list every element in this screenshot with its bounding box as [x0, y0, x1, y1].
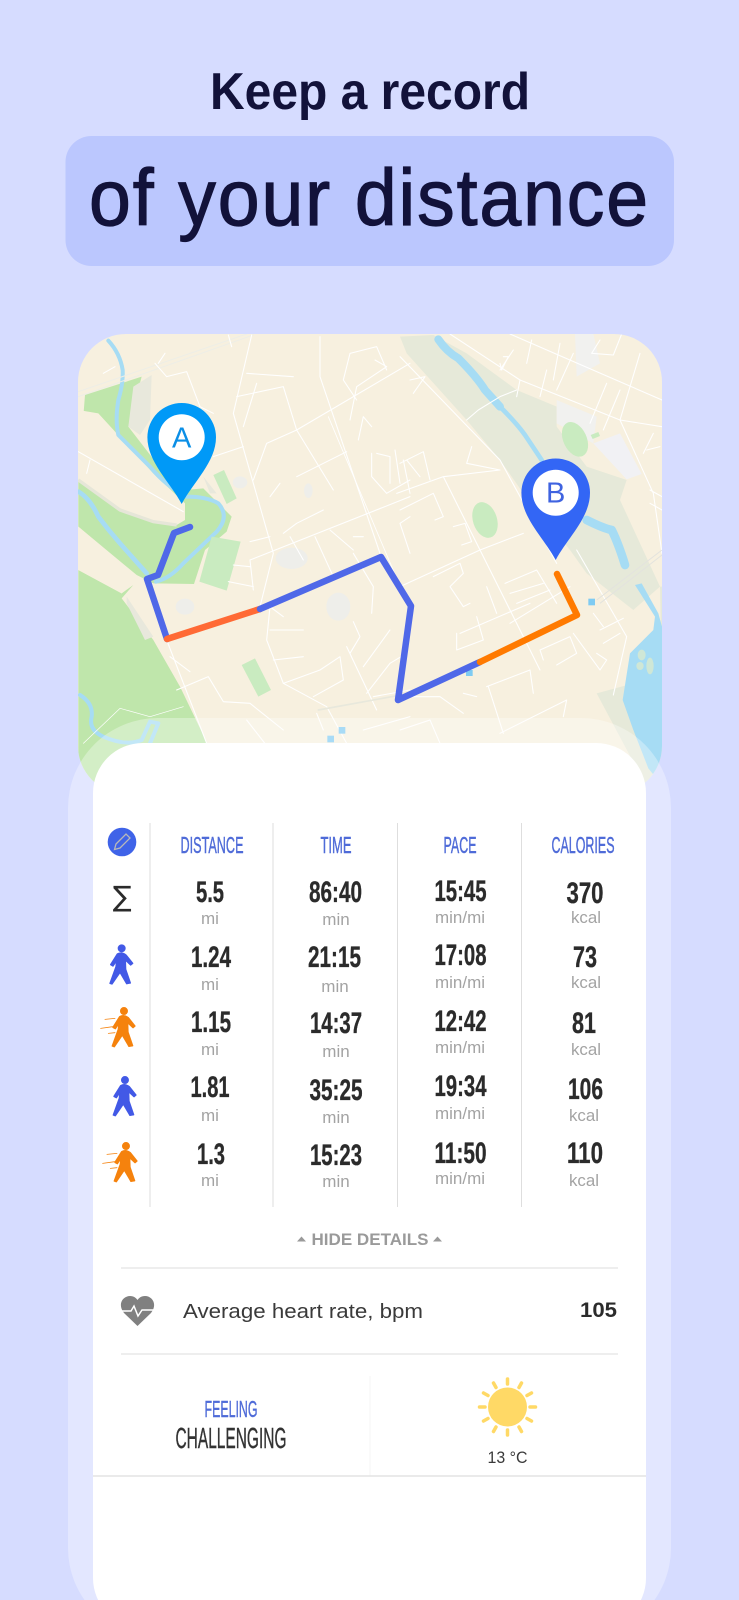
column: distance: mi: [201, 1106, 219, 1125]
column: pace: 11:50: [434, 1137, 486, 1170]
column: time: min: [322, 1172, 350, 1191]
hide details toggle: HIDE DETAILS: [312, 1230, 428, 1249]
pin B: B: [546, 478, 565, 510]
column: calories: kcal: [571, 908, 601, 927]
column: pace: min/mi: [435, 1104, 485, 1123]
column: pace: 19:34: [434, 1070, 487, 1103]
column: time: min: [322, 910, 350, 929]
column: calories: 110: [567, 1137, 603, 1170]
feeling label: FEELING: [204, 1396, 258, 1422]
column: distance: mi: [201, 1040, 219, 1059]
column: time: [308, 832, 362, 1191]
icon: walking blue 2: [113, 1076, 136, 1116]
icon: walking blue 1: [110, 944, 133, 984]
temperature: 13 °C: [488, 1448, 528, 1467]
column: time: min: [321, 977, 349, 996]
column: time: 86:40: [309, 876, 362, 909]
column: distance: mi: [201, 975, 219, 994]
column: calories: 106: [568, 1073, 603, 1106]
column: pace: min/mi: [435, 1038, 485, 1057]
column: time: 14:37: [310, 1007, 362, 1040]
column: calories: CALORIES: [552, 832, 614, 858]
column: time: 21:15: [308, 941, 361, 974]
column: pace: min/mi: [435, 908, 485, 927]
column: calories: kcal: [569, 1171, 599, 1190]
column: distance: mi: [201, 1171, 219, 1190]
white stats card: [93, 743, 646, 1600]
translucent outer panel: [68, 718, 671, 1600]
column: distance: DISTANCE: [180, 832, 244, 858]
column: calories: 370: [566, 877, 604, 910]
title line: Keep a record: Keep a record: [210, 63, 530, 121]
map terrain right half: [397, 334, 663, 793]
column: calories: 73: [573, 941, 597, 974]
column: calories: kcal: [571, 1040, 601, 1059]
column: distance: 1.3: [197, 1138, 225, 1171]
heart rate value: 105: [580, 1298, 617, 1322]
column: pace: min/mi: [435, 1169, 485, 1188]
column: calories: 81: [572, 1007, 596, 1040]
average heart rate label: Average heart rate, bpm: [183, 1301, 423, 1323]
column: pace: 12:42: [434, 1005, 486, 1038]
icon: sum: ∑: [113, 880, 132, 913]
column: time: TIME: [320, 832, 352, 858]
icon: heart rate: [121, 1296, 154, 1326]
column: distance: 5.5: [196, 876, 224, 909]
column: pace: PACE: [444, 832, 476, 858]
column: time: 15:23: [310, 1139, 362, 1172]
icon: running orange 2: [103, 1142, 137, 1182]
column: calories: kcal: [569, 1106, 599, 1125]
map terrain left half: [78, 334, 410, 793]
heading highlight: of your distance: [66, 136, 674, 266]
column: pace: 17:08: [434, 939, 486, 972]
column: time: 35:25: [310, 1074, 362, 1107]
heading highlight: of your distance: of your distance: [89, 153, 650, 242]
column: time: min: [322, 1108, 350, 1127]
column: calories: kcal: [571, 973, 601, 992]
column: pace: 15:45: [434, 875, 486, 908]
route line: [147, 527, 577, 700]
column: distance: 1.24: [191, 941, 231, 974]
pin A: A: [172, 422, 192, 454]
feeling value: CHALLENGING: [176, 1423, 286, 1455]
pin A: [147, 403, 216, 504]
icon: pencil edit button: [108, 828, 136, 856]
column: time: min: [322, 1042, 350, 1061]
column: calories: [552, 832, 614, 1190]
icon: sun: [480, 1379, 536, 1435]
column: pace: [434, 832, 487, 1188]
column: distance: 1.15: [191, 1006, 231, 1039]
icon: running orange 1: [101, 1007, 135, 1047]
column: pace: min/mi: [435, 973, 485, 992]
panel: route map: [78, 334, 663, 794]
column: distance: 1.81: [190, 1071, 230, 1104]
column: distance: mi: [201, 909, 219, 928]
column: distance: [180, 832, 244, 1190]
pin B: [521, 458, 590, 560]
